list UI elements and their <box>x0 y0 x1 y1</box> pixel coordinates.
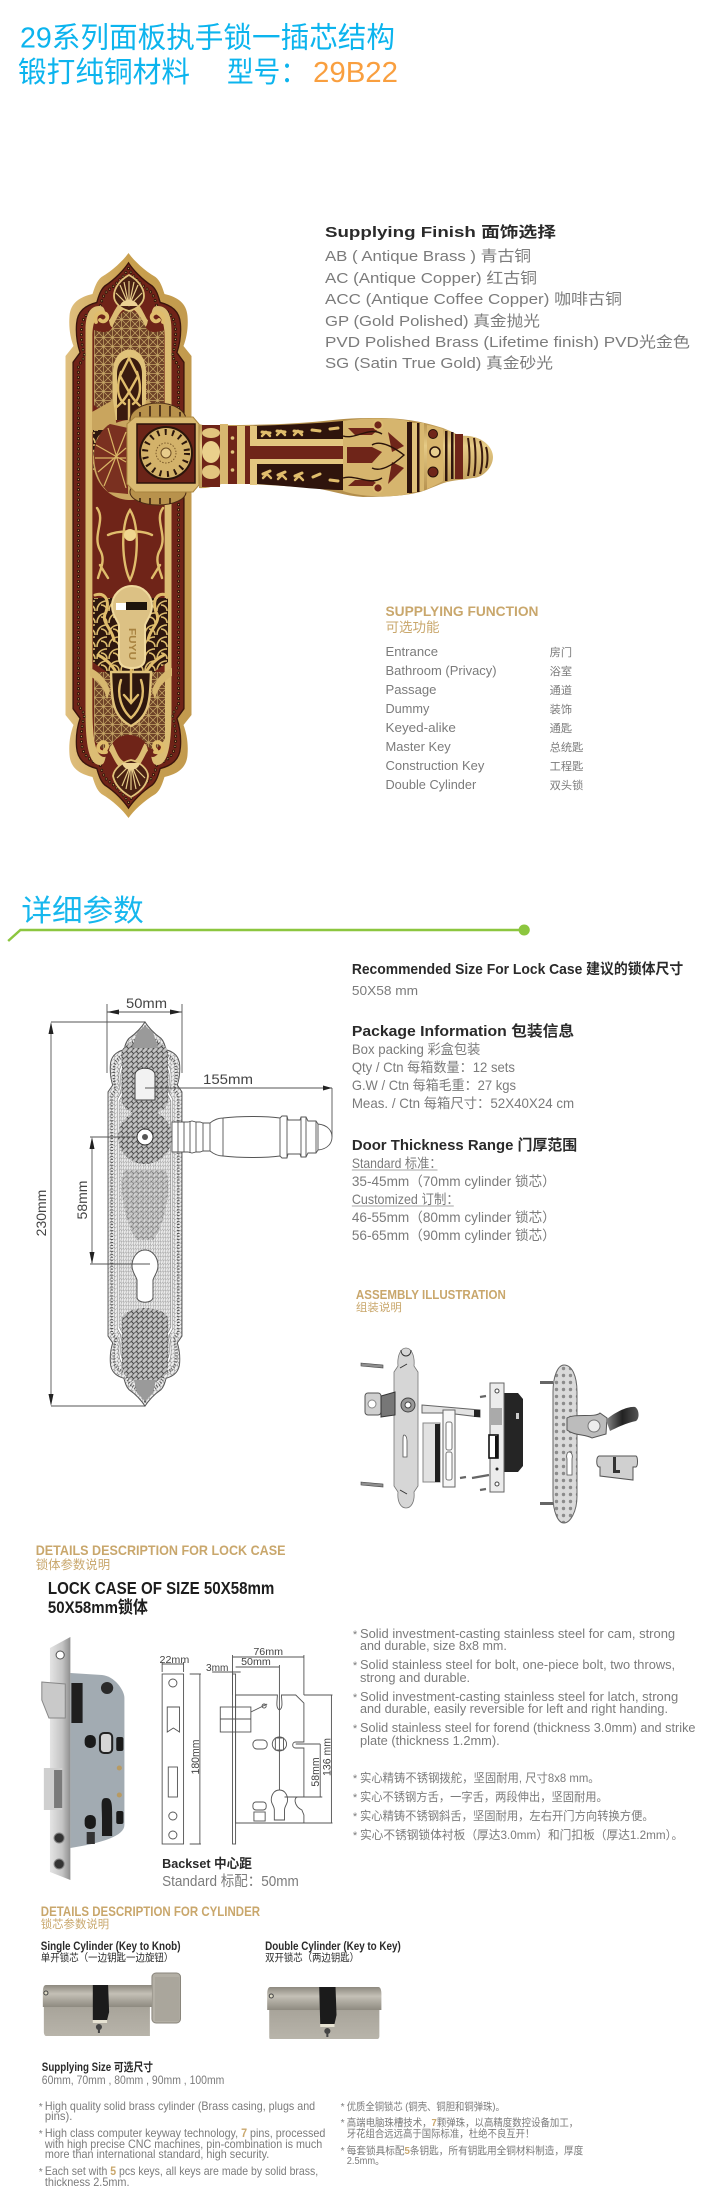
heading: assembly illustration <box>356 1288 506 1314</box>
text block: recommended size <box>352 960 683 998</box>
text block: supplying function: Dummy <box>385 702 430 716</box>
text block: supplying function: Double Cylinder <box>385 778 476 792</box>
right plate <box>553 1365 577 1523</box>
title: 型号： <box>227 56 307 89</box>
technical drawing: lock case: 76mm <box>253 1646 283 1658</box>
text block: cylinder features chinese: 优质全铜锁芯 (铜壳、铜胆和铜弹珠)。 <box>347 2100 505 2113</box>
text block: door thickness range: 35-45mm（70mm cylinder 锁芯） <box>352 1174 556 1189</box>
text block: supplying function <box>385 604 583 792</box>
collar rings <box>407 422 412 493</box>
text block: lock case features: and durable, size 8x8 mm. <box>360 1639 507 1653</box>
technical drawing: dimensioned handle: 230mm <box>33 1190 49 1236</box>
heading: lock case of size <box>48 1578 274 1617</box>
text block: lock case features: and durable, easily reversible for left and right handing. <box>360 1702 668 1716</box>
text block: door thickness range: Door Thickness Range 门厚范围 <box>352 1136 577 1154</box>
text block: cylinder features english: thickness 2.5mm. <box>45 2176 130 2189</box>
panel: double cylinder <box>265 1940 401 2039</box>
icon: single cylinder photo <box>43 1973 181 2036</box>
shaft bands <box>250 421 343 446</box>
technical drawing: lock case: 136 mm <box>321 1738 333 1776</box>
left plate <box>394 1348 418 1508</box>
text block: supplying function: 可选功能 <box>385 620 440 635</box>
technical drawing: dimensioned handle: 155mm <box>203 1071 253 1087</box>
heading: cylinder details: DETAILS DESCRIPTION FOR CYLINDER <box>41 1904 260 1919</box>
text block: package information: Package Information 包装信息 <box>352 1022 574 1040</box>
technical drawing: dimensioned handle: 50mm <box>126 995 167 1011</box>
photo: lock case <box>42 1637 124 1880</box>
technical drawing: lock case: 180mm <box>190 1739 202 1774</box>
text block: door thickness range: 46-55mm（80mm cylinder 锁芯） <box>352 1210 556 1225</box>
text block: supplying finish: Supplying Finish 面饰选择 <box>325 223 556 241</box>
text block: supplying function: Construction Key <box>385 759 485 773</box>
text block: supplying size: Supplying Size 可选尺寸 <box>42 2060 153 2074</box>
neck balls <box>202 425 220 487</box>
right handle <box>567 1413 607 1438</box>
heading: lock case details <box>36 1542 286 1572</box>
square neck <box>127 417 199 492</box>
text block: supplying function: Keyed-alike <box>385 721 456 735</box>
product photo: gold lever handle on plate <box>66 253 493 818</box>
arch motif upper <box>113 350 146 420</box>
text block: package information: Qty / Ctn 每箱数量：12 sets <box>352 1060 515 1075</box>
rose sphere <box>93 420 167 500</box>
text block: cylinder features chinese: * <box>341 2146 345 2157</box>
text block: lock case features: 实心精铸不锈钢拨舵，坚固耐用, 尺寸8x8 mm。 <box>360 1770 600 1785</box>
faceplate front <box>162 1674 184 1844</box>
text block: door thickness range: Standard 标准： <box>352 1156 442 1171</box>
lever handle <box>199 418 493 497</box>
screws <box>361 1363 383 1487</box>
text block: supplying function: 浴室 <box>550 664 572 678</box>
text block: supplying function: Bathroom (Privacy) <box>385 664 497 678</box>
dark etched zones <box>122 1040 168 1115</box>
cylinder <box>597 1456 638 1480</box>
text block: lock case features: * <box>353 1629 358 1641</box>
text block: lock case features: * <box>353 1692 358 1704</box>
text block: lock case features <box>353 1627 696 1842</box>
text block: lock case features: 实心不锈钢锁体衬板（厚达3.0mm）和门扣板（厚达1.2mm）。 <box>360 1827 683 1842</box>
text block: supplying function: 工程匙 <box>550 760 583 773</box>
text block: lock case features: Solid investment-casting stainless steel for latch, strong <box>360 1690 678 1704</box>
strike plate <box>443 1410 455 1487</box>
text block: cylinder features english: High class computer keyway technology, 7 pins, processed <box>45 2127 325 2140</box>
text block: supplying function: 装饰 <box>550 702 572 716</box>
technical drawing: lock case: 3mm <box>206 1662 229 1674</box>
heading: lock case details: 锁体参数说明 <box>36 1557 110 1572</box>
text block: door thickness range: Customized 订制： <box>352 1192 459 1207</box>
dimension lines <box>162 1655 332 1844</box>
scroll curls <box>96 312 163 752</box>
text block: supplying function: Entrance <box>385 645 438 659</box>
text block: cylinder features english: pins). <box>45 2110 72 2123</box>
shaft ornament <box>343 418 409 496</box>
panel: single cylinder: Single Cylinder (Key to Knob) <box>41 1940 181 1953</box>
text block: supplying function: 房门 <box>550 645 572 659</box>
text block: cylinder features english <box>39 2100 325 2189</box>
text block: cylinder features chinese: 每套锁具标配5条钥匙，所有钥匙用全铜材料制造，厚度 <box>347 2144 584 2157</box>
text block: cylinder features english: with high precise CNC machines, pin-combination is much <box>44 2138 322 2151</box>
text block: lock case features: * <box>353 1792 358 1804</box>
left knob <box>365 1393 381 1415</box>
technical drawing: lock case <box>160 1646 333 1844</box>
escutcheon keyhole: FUYU <box>126 628 137 660</box>
text block: supplying size: 60mm, 70mm , 80mm , 90mm , 100mm <box>42 2073 224 2087</box>
drawn lever <box>172 1116 332 1158</box>
text block: cylinder features english: High quality solid brass cylinder (Brass casing, plugs and <box>45 2100 315 2113</box>
text block: recommended size: 50X58 mm <box>352 983 418 998</box>
fretwork panels <box>94 310 164 420</box>
text block: supplying finish: GP (Gold Polished) 真金抛光 <box>325 312 540 330</box>
assembly exploded diagram <box>361 1348 639 1523</box>
title: 锻打纯铜材料 <box>18 56 190 89</box>
text block: supplying function: Master Key <box>385 740 451 754</box>
panel: single cylinder: 单开锁芯（一边钥匙一边旋钮） <box>41 1951 173 1964</box>
text block: lock case features: * <box>353 1811 358 1823</box>
text block: package information: Meas. / Ctn 每箱尺寸：52X40X24 cm <box>352 1096 574 1111</box>
text block: supplying size <box>42 2060 224 2087</box>
heading: assembly illustration: 组装说明 <box>356 1300 402 1314</box>
text block: cylinder features english: * <box>39 2167 43 2178</box>
text block: cylinder features chinese <box>341 2100 584 2167</box>
text block: backset <box>162 1855 299 1890</box>
text block: supplying function: 通匙 <box>550 722 572 735</box>
panel: double cylinder: Double Cylinder (Key to Key) <box>265 1940 401 1953</box>
title <box>18 22 398 89</box>
text block: package information: Box packing 彩盒包装 <box>352 1041 481 1057</box>
text block: supplying finish: ACC (Antique Coffee Copper) 咖啡古铜 <box>325 291 622 308</box>
text block: lock case features: * <box>353 1830 358 1842</box>
mid plate scrollwork <box>97 508 163 580</box>
icon: double cylinder photo <box>267 1987 381 2039</box>
text block: backset: Standard 标配：50mm <box>162 1873 299 1890</box>
heading: lock case details: DETAILS DESCRIPTION FOR LOCK CASE <box>36 1542 286 1558</box>
technical drawing: lock case: 58mm <box>310 1757 322 1787</box>
keyhole outline <box>132 1250 158 1302</box>
text block: cylinder features english: * <box>39 2102 43 2113</box>
dimension lines <box>51 1004 332 1406</box>
text block: cylinder features chinese: 牙花组合远远高于国际标准，杜绝不良互开！ <box>347 2127 534 2140</box>
heading: lock case of size: LOCK CASE OF SIZE 50X58mm <box>48 1578 274 1598</box>
text block: cylinder features chinese: 高端电脑珠槽技术，7颗弹珠，以高精度数控设备加工， <box>347 2116 578 2129</box>
heading: cylinder details <box>41 1904 260 1931</box>
text block: door thickness range: 56-65mm（90mm cylinder 锁芯） <box>352 1228 556 1243</box>
panel: double cylinder: 双开锁芯（两边钥匙） <box>265 1951 359 1964</box>
technical drawing: dimensioned handle: 58mm <box>74 1181 90 1219</box>
text block: lock case features: plate (thickness 1.2mm). <box>360 1734 500 1748</box>
text block: lock case features: * <box>353 1660 358 1672</box>
text block: recommended size: Recommended Size For Lock Case 建议的锁体尺寸 <box>352 960 683 978</box>
heading: cylinder details: 锁芯参数说明 <box>41 1917 109 1931</box>
escutcheon keyhole <box>112 586 152 668</box>
text block: supplying finish: AC (Antique Copper) 红古铜 <box>325 270 537 287</box>
text block: cylinder features chinese: 2.5mm。 <box>347 2155 384 2167</box>
panel: single cylinder <box>41 1940 181 2036</box>
text block: supplying finish: PVD Polished Brass (Lifetime finish) PVD光金色 <box>325 334 690 351</box>
text block: supplying finish: AB ( Antique Brass ) 青古铜 <box>325 248 531 265</box>
lower arch <box>111 672 151 726</box>
text block: lock case features: 实心不锈钢方舌，一字舌，两段伸出，坚固耐用。 <box>360 1789 608 1804</box>
text block: lock case features: Solid stainless steel for bolt, one-piece bolt, two throws, <box>360 1658 675 1672</box>
text block: supplying function: 通道 <box>550 683 572 697</box>
spindle <box>422 1405 480 1417</box>
text block: supplying function: 总统匙 <box>550 740 583 754</box>
text block: lock case features: * <box>353 1723 358 1735</box>
text block: package information <box>352 1022 574 1111</box>
text block: cylinder features english: more than international standard, high security. <box>45 2148 269 2161</box>
text block: lock case features: 实心精铸不锈钢斜舌，坚固耐用，左右开门方向转换方便。 <box>360 1808 654 1823</box>
text block: supplying function: SUPPLYING FUNCTION <box>385 604 538 619</box>
text block: cylinder features chinese: * <box>341 2118 345 2129</box>
technical drawing: dimensioned handle <box>33 995 332 1406</box>
text block: backset: Backset 中心距 <box>162 1855 252 1871</box>
text block: supplying function: Passage <box>385 683 436 697</box>
text block: lock case features: * <box>353 1773 358 1785</box>
text block: supplying finish <box>325 223 690 372</box>
sunburst top <box>114 275 144 311</box>
section heading: details: 详细参数 <box>21 894 144 928</box>
title: 29B22 <box>313 57 398 89</box>
title: 29系列面板执手锁一插芯结构 <box>20 22 395 54</box>
technical drawing: lock case: 50mm <box>241 1656 271 1668</box>
text block: cylinder features english: Each set with 5 pcs keys, all keys are made by solid brass, <box>45 2165 318 2178</box>
section heading: details <box>8 894 530 941</box>
heading: assembly illustration: ASSEMBLY ILLUSTRATION <box>356 1288 506 1302</box>
lock case <box>504 1393 523 1472</box>
side body outline <box>233 1674 236 1844</box>
text block: supplying finish: SG (Satin True Gold) 真金砂光 <box>325 354 553 372</box>
text block: lock case features: Solid investment-casting stainless steel for cam, strong <box>360 1627 675 1641</box>
text block: cylinder features english: * <box>39 2129 43 2140</box>
text block: cylinder features chinese: * <box>341 2102 345 2113</box>
text block: lock case features: Solid stainless steel for forend (thickness 3.0mm) and strike <box>360 1721 696 1735</box>
technical drawing: lock case: 22mm <box>160 1654 189 1666</box>
escutcheon surround <box>93 598 168 682</box>
heading: lock case of size: 50X58mm锁体 <box>48 1597 148 1617</box>
text block: lock case features: strong and durable. <box>360 1671 470 1685</box>
text block: package information: G.W / Ctn 每箱毛重：27 kgs <box>352 1078 516 1093</box>
text block: supplying function: 双头锁 <box>550 778 583 792</box>
sunburst bottom <box>113 760 148 797</box>
text block: door thickness range <box>352 1136 577 1243</box>
